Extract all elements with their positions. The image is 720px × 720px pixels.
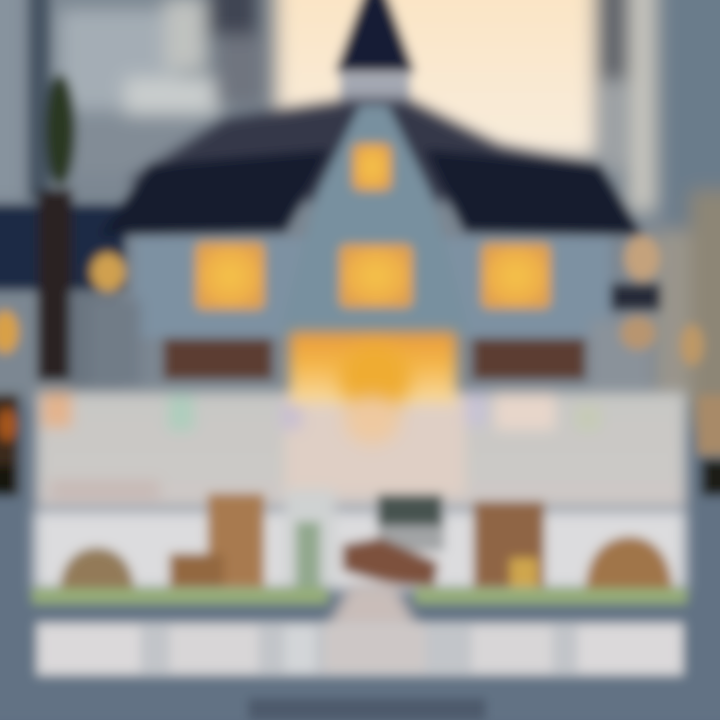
roof upper slopes [130, 100, 600, 200]
small lights on the sides [90, 252, 126, 292]
spire [336, 0, 414, 72]
icon: left hut [60, 548, 134, 594]
roof lower left lobe [100, 150, 330, 235]
roof right end [610, 284, 660, 310]
side walls [135, 238, 610, 338]
wall base shadow [90, 300, 140, 390]
icon: tall boxes left [170, 494, 264, 588]
porch [164, 332, 585, 444]
window: gable [352, 143, 392, 191]
bottom footer band [248, 698, 486, 720]
panel: bottom caption cards [36, 622, 684, 676]
icon: low brown pile [343, 538, 438, 586]
left side dark tree and lower-left masses [0, 0, 720, 495]
icons: brown illustrations [60, 494, 672, 594]
panel: upper card row [36, 392, 686, 508]
entrance core [339, 344, 411, 412]
icon: tall boxes right [474, 502, 544, 588]
roof lower right lobe [425, 150, 642, 235]
entrance reflection [344, 396, 400, 444]
spire base [340, 72, 410, 110]
porch beam left [164, 339, 272, 379]
window: right [481, 243, 551, 309]
icon: tall plant [296, 522, 320, 594]
background: sky and city buildings [0, 0, 720, 430]
porch beam right [473, 339, 585, 379]
central path [320, 585, 425, 640]
right side base [590, 320, 650, 390]
icon: grey box [378, 515, 444, 551]
window: centre [339, 244, 413, 308]
window: left [195, 242, 265, 310]
glowing entrance [290, 332, 456, 404]
icon: dark sign [378, 495, 442, 525]
house walls and central gable [90, 105, 650, 390]
icon: right hut [586, 537, 672, 592]
grass strip [32, 588, 687, 604]
spire and roof [100, 0, 660, 310]
central gable [280, 105, 470, 335]
panel: lower card row [34, 490, 686, 590]
lit windows [0, 143, 704, 442]
